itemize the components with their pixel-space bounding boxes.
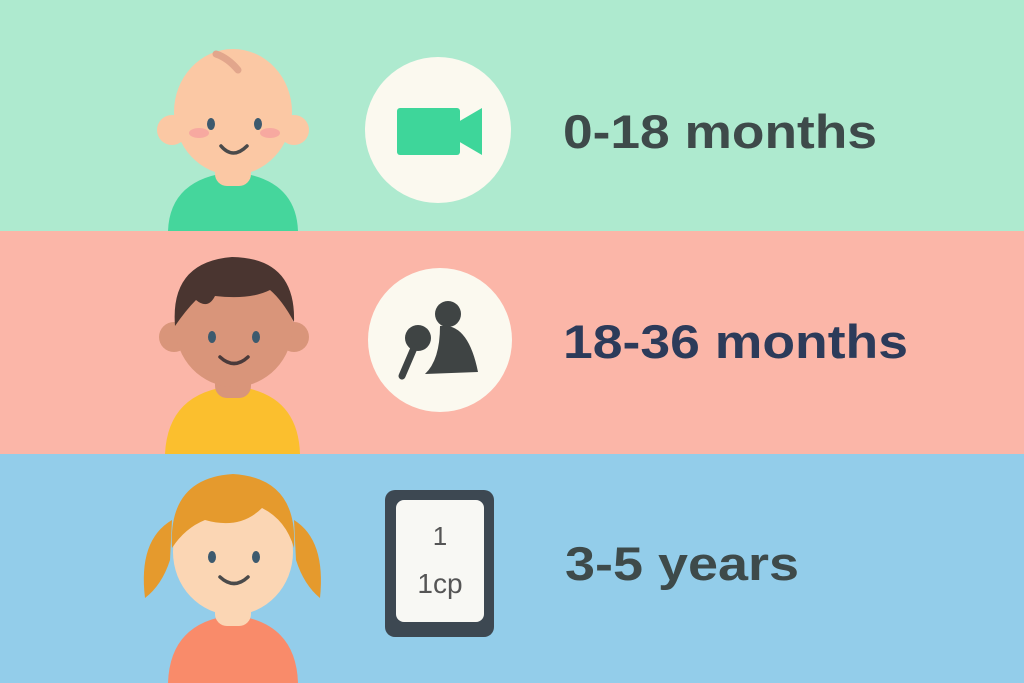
icon: tablet [385, 490, 494, 637]
icon: video camera [365, 57, 511, 203]
icon: tablet: 1 [433, 521, 447, 551]
illustration: toddler [159, 257, 309, 454]
icon: parent and child [368, 268, 512, 412]
label: 3-5 years: 3-5 years [565, 537, 799, 590]
band: 3-5 years [0, 454, 1024, 683]
band: 18-36 months [0, 231, 1024, 454]
illustration: child [144, 474, 321, 683]
illustration: baby [157, 49, 309, 231]
band: 0-18 months [0, 0, 1024, 231]
icon: tablet: 1cp [417, 568, 463, 599]
label: 18-36 months: 18-36 months [563, 315, 908, 368]
label: 0-18 months: 0-18 months [563, 105, 877, 158]
